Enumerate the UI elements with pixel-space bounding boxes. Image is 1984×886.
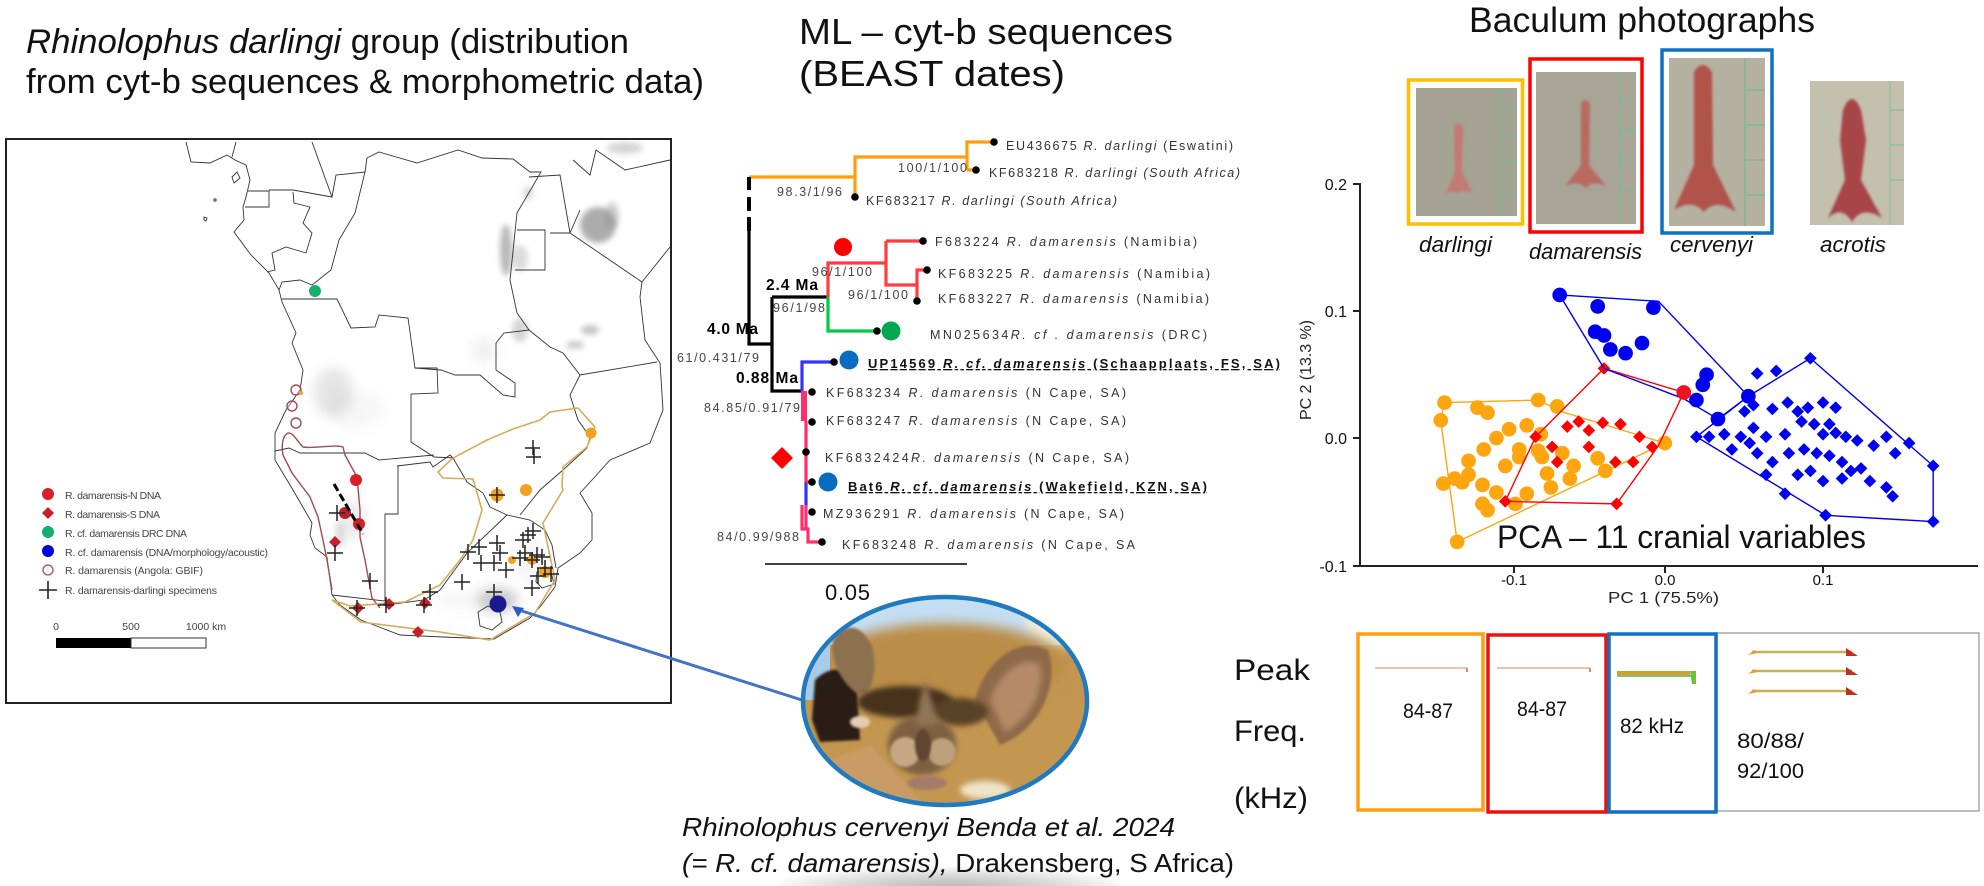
species labels: damarensis <box>1529 239 1642 264</box>
tip labels: KF683218 R. darlingi (South Africa) <box>989 166 1240 180</box>
photo: damarensis <box>1530 59 1642 232</box>
title: map heading: from cyt-b sequences & morphometric data) <box>26 63 704 101</box>
call box: acrotis: 92/100 <box>1737 760 1804 783</box>
orange points <box>299 391 596 578</box>
call box: damarensis: 84-87 <box>1517 698 1567 721</box>
branches: green clade <box>828 297 877 331</box>
legend: R. cf. damarensis (DNA/morphology/acoustic) <box>65 547 268 559</box>
branches: darlingi clade <box>749 142 994 197</box>
axis title: PC 2: PC 2 (13.3 %) <box>1298 320 1315 420</box>
legend <box>39 488 268 599</box>
row label: Peak Freq. (kHz): Peak <box>1234 654 1311 687</box>
branches: pink clade <box>802 391 822 542</box>
y axis tick labels: -0.1 <box>1319 559 1347 576</box>
photo: acrotis <box>1810 81 1904 225</box>
lesotho and eswatini outlines <box>478 572 554 630</box>
y axis tick labels: 0.0 <box>1325 431 1347 448</box>
blue circle hull <box>1560 295 1748 419</box>
support values and dates: 98.3/1/96 <box>777 185 842 199</box>
red points: N DNA <box>339 474 365 530</box>
panel: baculum photographs <box>1408 50 1904 264</box>
row label: Peak Freq. (kHz) <box>1234 654 1311 815</box>
photo: cervenyi <box>1662 50 1772 233</box>
tip labels: MZ936291 R. damarensis (N Cape, SA) <box>823 507 1124 521</box>
row label: Peak Freq. (kHz): Freq. <box>1234 715 1306 748</box>
shadow under caption <box>780 845 1120 886</box>
clade markers <box>771 238 900 492</box>
tip labels: KF683247 R. damarensis (N Cape, SA) <box>826 414 1126 428</box>
x axis tick labels: 0.0 <box>1655 572 1675 589</box>
title: map heading <box>26 23 704 101</box>
scale bar: 0 <box>53 621 59 633</box>
species labels <box>1419 232 1886 264</box>
tip labels <box>823 139 1280 552</box>
call box: cervenyi: 82 kHz <box>1620 715 1684 738</box>
support values and dates: 100/1/100 <box>898 161 967 175</box>
tip labels: UP14569 R. cf. damarensis (Schaapplaats, FS, SA) <box>868 356 1280 371</box>
tip dots <box>802 138 998 546</box>
orange hull <box>1441 400 1665 542</box>
blue points: cervenyi <box>1552 288 1756 426</box>
highland shading <box>313 142 643 612</box>
title: baculum heading: Baculum photographs <box>1469 1 1815 40</box>
tip labels: KF683227 R. damarensis (Namibia) <box>938 292 1209 306</box>
call box: acrotis: 80/88/ <box>1737 730 1804 753</box>
support values and dates: 96/1/100 <box>812 265 872 279</box>
open circles: Angola GBIF records <box>287 385 301 428</box>
chart label: PCA: PCA – 11 cranial variables <box>1497 519 1866 555</box>
blue diamonds: acrotis <box>1690 352 1940 528</box>
support values and dates: 4.0 Ma <box>707 321 758 338</box>
legend: R. cf. damarensis DRC DNA <box>65 528 187 540</box>
blue diamond hull <box>1696 358 1933 522</box>
axes <box>1353 184 1978 573</box>
tip labels: KF6832424R. damarensis (N Cape, SA) <box>825 451 1129 465</box>
call box: darlingi: 84-87 <box>1403 700 1453 723</box>
photo: darlingi <box>1408 80 1522 224</box>
orange points: darlingi <box>1433 393 1672 549</box>
panel: distribution map <box>6 139 671 703</box>
red diamonds: S DNA <box>329 536 431 638</box>
support values and dates: 0.88 Ma <box>736 370 798 387</box>
y axis tick labels: 0.2 <box>1325 177 1347 194</box>
tan range contour <box>332 408 595 640</box>
support values and dates: 84.85/0.91/79 <box>704 401 800 415</box>
legend: R. damarensis-darlingi specimens <box>65 585 217 597</box>
arrow: map to bat photo <box>522 611 805 701</box>
branches: red clade <box>828 241 927 301</box>
scale bar: 500 <box>122 621 140 633</box>
tree scale bar: 0.05 <box>825 580 870 605</box>
brown range contour <box>282 433 380 608</box>
y axis tick labels: 0.1 <box>1325 304 1347 321</box>
coastline <box>186 142 670 639</box>
tip labels: Bat6 R. cf. damarensis (Wakefield, KZN, SA) <box>848 479 1207 494</box>
country borders <box>232 142 670 605</box>
tip labels: EU436675 R. darlingi (Eswatini) <box>1006 139 1233 153</box>
red diamonds: damarensis <box>1499 362 1658 510</box>
red hull <box>1505 368 1684 504</box>
tip labels: KF683234 R. damarensis (N Cape, SA) <box>826 386 1126 400</box>
caption: bat species <box>682 812 1234 878</box>
row label: Peak Freq. (kHz): (kHz) <box>1234 782 1308 815</box>
panel: call frequencies <box>1358 633 1979 812</box>
branches: backbone <box>749 231 828 391</box>
x axis tick labels <box>1501 572 1833 589</box>
tip labels: KF683248 R. damarensis (N Cape, SA <box>842 538 1136 552</box>
y axis tick labels <box>1319 177 1347 576</box>
tip labels: F683224 R. damarensis (Namibia) <box>935 235 1197 249</box>
species labels: acrotis <box>1820 232 1886 257</box>
tip labels: MN025634R. cf . damarensis (DRC) <box>930 328 1207 342</box>
title: map heading: Rhinolophus darlingi group (distribution <box>26 23 629 61</box>
species labels: cervenyi <box>1670 232 1754 257</box>
photo: Rhinolophus cervenyi <box>800 594 1094 810</box>
scale bar: 1000 km <box>186 621 226 633</box>
call box: damarensis <box>1488 635 1606 812</box>
title: tree heading <box>799 11 1173 94</box>
support values and dates: 96/1/100 <box>848 288 908 302</box>
branches: dashed root <box>747 177 751 231</box>
chart: PCA scatter <box>1298 177 1978 607</box>
crosses: specimens <box>327 440 559 616</box>
support values and dates: 84/0.99/988 <box>717 530 799 544</box>
title: tree heading: ML – cyt-b sequences <box>799 11 1173 52</box>
support values and dates <box>677 161 967 544</box>
branches: blue lineages <box>802 362 834 505</box>
title: tree heading: (BEAST dates) <box>799 53 1065 94</box>
axis title: PC 1: PC 1 (75.5%) <box>1608 590 1719 607</box>
legend: R. damarensis-S DNA <box>65 509 160 521</box>
dashed species divide <box>334 484 363 534</box>
legend: R. damarensis (Angola: GBIF) <box>65 565 203 577</box>
small blue marker <box>512 606 524 617</box>
red circle <box>1676 385 1691 400</box>
support values and dates: 2.4 Ma <box>766 277 818 294</box>
caption: bat species: Rhinolophus cervenyi Benda et al. 2024 <box>682 812 1175 842</box>
legend: R. damarensis-N DNA <box>65 490 161 502</box>
call box: acrotis <box>1717 633 1979 811</box>
tip labels: KF683225 R. damarensis (Namibia) <box>938 267 1210 281</box>
call box: cervenyi <box>1609 634 1716 812</box>
support values and dates: 96/1/98 <box>773 301 825 315</box>
scale bar <box>53 621 226 648</box>
x axis tick labels: 0.1 <box>1813 572 1833 589</box>
green point: DRC DNA <box>309 285 321 297</box>
phylogenetic tree <box>677 138 1280 605</box>
blue point: R. cf. damarensis <box>490 596 506 612</box>
x axis tick labels: -0.1 <box>1501 572 1527 589</box>
caption: bat species: (= R. cf. damarensis), Drakensberg, S Africa) <box>682 848 1234 878</box>
tip labels: KF683217 R. darlingi (South Africa) <box>866 194 1117 208</box>
call box: darlingi <box>1358 634 1483 810</box>
support values and dates: 61/0.431/79 <box>677 351 759 365</box>
species labels: darlingi <box>1419 232 1493 257</box>
islands <box>204 172 240 221</box>
